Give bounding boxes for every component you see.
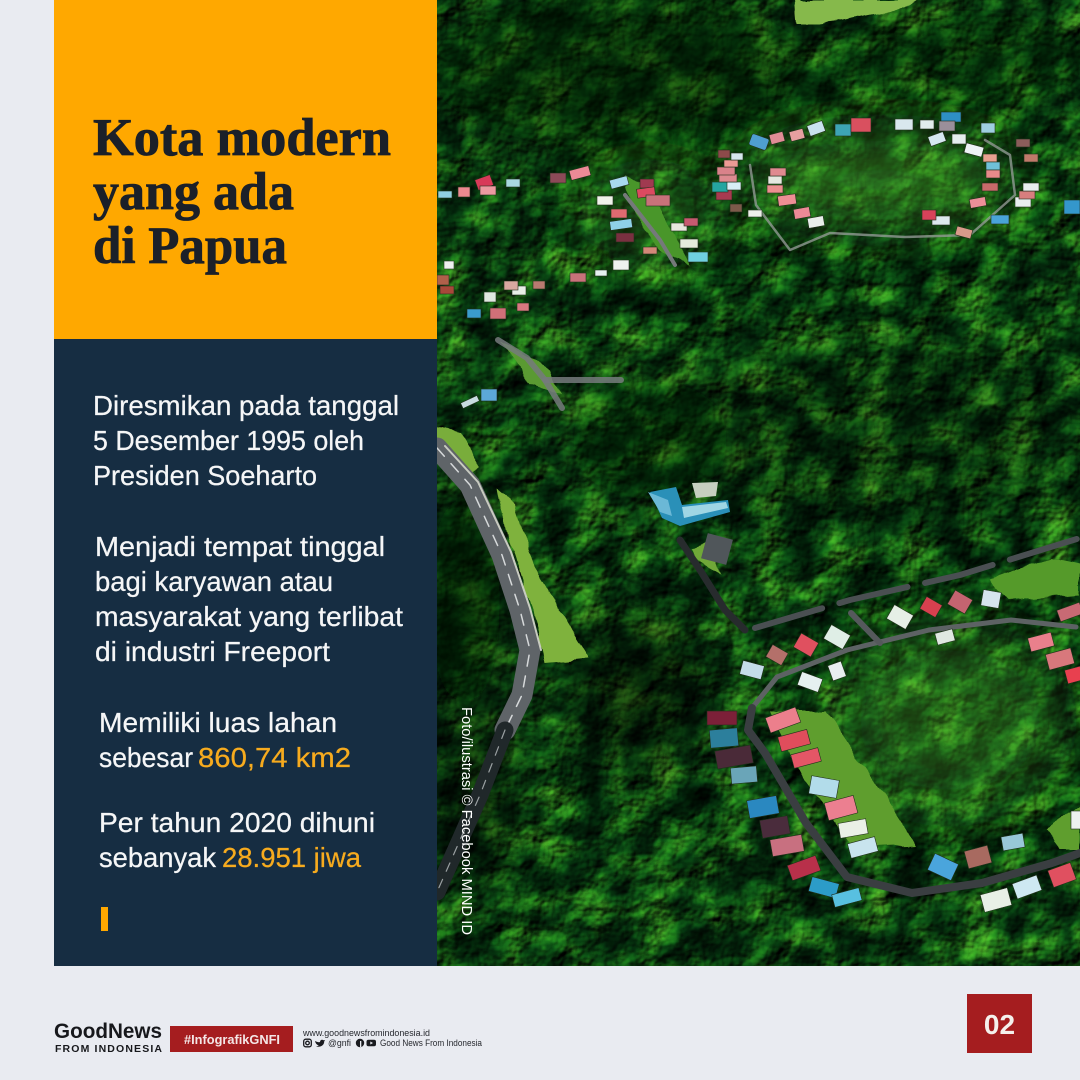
text: inauguration: Presiden Soeharto <box>93 460 317 491</box>
hashtag badge: #InfografikGNFI <box>184 1033 280 1047</box>
text: residents: Menjadi tempat tinggal <box>95 531 385 562</box>
icon: facebook <box>356 1039 364 1047</box>
text: land area <box>99 707 351 773</box>
page number <box>967 994 1032 1053</box>
houses: upper ring and clusters <box>437 112 1080 409</box>
text: residents: masyarakat yang terlibat <box>95 601 403 632</box>
website and social: @gnfi <box>328 1038 351 1048</box>
text: residents <box>95 531 403 667</box>
icon: youtube <box>366 1040 376 1046</box>
logo: GoodNews From Indonesia: GoodNews <box>54 1020 162 1043</box>
text: residents: di industri Freeport <box>95 636 330 667</box>
text: inauguration: 5 Desember 1995 oleh <box>93 425 364 456</box>
photo: aerial view of forest town <box>430 0 1080 966</box>
icon: twitter <box>315 1040 325 1047</box>
text: land area: Memiliki luas lahan <box>99 707 337 738</box>
building: blue-roofed complex <box>648 482 730 526</box>
photo credit: Foto/ilustrasi © Facebook MIND ID <box>458 707 474 935</box>
website and social <box>302 1028 482 1048</box>
footer <box>54 994 1032 1055</box>
main highway, shaded part <box>437 730 505 892</box>
logo: GoodNews From Indonesia: FROM INDONESIA <box>55 1043 162 1055</box>
text: inauguration: Diresmikan pada tanggal <box>93 390 399 421</box>
forest shading <box>430 0 1080 890</box>
main highway, sunlit part <box>437 448 530 730</box>
clearings and lawns <box>437 0 1080 850</box>
forest texture <box>437 0 1080 966</box>
text: population: 28.951 jiwa <box>222 842 361 873</box>
text: land area: 860,74 km2 <box>198 742 351 773</box>
heading: Kota modern <box>93 109 391 167</box>
icon: instagram <box>304 1039 311 1047</box>
logo: GoodNews From Indonesia <box>54 1020 162 1055</box>
text: population: sebanyak <box>99 842 217 873</box>
heading: yang ada <box>93 163 294 221</box>
heading <box>93 109 391 275</box>
accent bar <box>101 907 108 931</box>
website and social: www.goodnewsfromindonesia.id <box>302 1028 430 1038</box>
hashtag badge <box>170 1026 293 1052</box>
panel: facts <box>54 339 437 966</box>
page number: 02 <box>984 1009 1015 1040</box>
text: land area: sebesar <box>99 742 193 773</box>
text: inauguration <box>93 390 399 491</box>
houses: lower town <box>707 590 1080 912</box>
website and social: Good News From Indonesia <box>380 1038 482 1048</box>
heading: di Papua <box>93 217 287 275</box>
connecting road <box>680 540 745 630</box>
roads <box>437 140 1080 893</box>
text: residents: bagi karyawan atau <box>95 566 333 597</box>
hill road <box>498 340 621 380</box>
panel: title <box>54 0 437 339</box>
text: population <box>99 807 375 873</box>
ring road <box>750 140 1015 250</box>
text: population: Per tahun 2020 dihuni <box>99 807 375 838</box>
lower town road <box>752 620 1076 708</box>
